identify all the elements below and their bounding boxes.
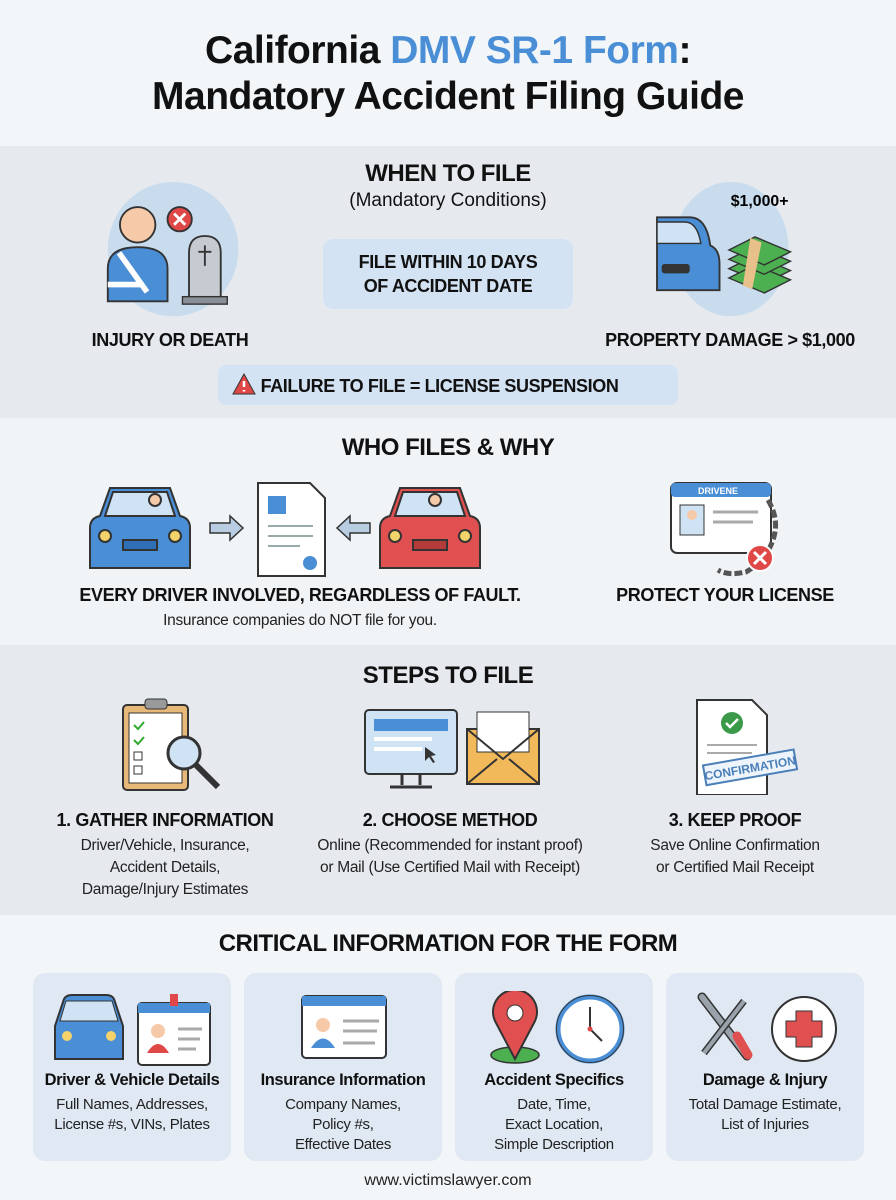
- label: injury or death: INJURY OR DEATH: [92, 330, 248, 350]
- text: insurance note: Insurance companies do NOT file for you.: [163, 612, 437, 629]
- icon: confirmation doc: [696, 699, 798, 795]
- heading: steps: STEPS TO FILE: [363, 662, 533, 689]
- icon: injury or death: [106, 182, 238, 316]
- desc: Damage/Injury Estimates: [82, 881, 248, 898]
- desc: [650, 837, 820, 876]
- callout: file within 10 days: FILE WITHIN 10 DAYS: [359, 252, 537, 272]
- label: 3. KEEP PROOF: [669, 810, 801, 830]
- panel: steps to file: [0, 645, 896, 915]
- desc: [494, 1096, 614, 1153]
- step 2: [317, 709, 583, 876]
- panel: when to file: [0, 146, 896, 418]
- label: property damage: PROPERTY DAMAGE > $1,000: [605, 330, 855, 350]
- desc: List of Injuries: [721, 1116, 809, 1133]
- title: [152, 29, 744, 118]
- desc: [285, 1096, 401, 1153]
- desc: Online (Recommended for instant proof): [317, 837, 583, 854]
- step 1: [57, 698, 273, 898]
- subheading: (Mandatory Conditions): [349, 190, 547, 211]
- desc: or Mail (Use Certified Mail with Receipt): [320, 859, 580, 876]
- heading: when to file: WHEN TO FILE: [365, 160, 531, 187]
- title: Accident Specifics: [484, 1071, 624, 1089]
- callout: file within 10 days: [323, 239, 573, 309]
- desc: Effective Dates: [295, 1136, 391, 1153]
- panel: who files & why: [0, 418, 896, 645]
- icon: insurance card: [301, 995, 387, 1059]
- heading: who files: WHO FILES & WHY: [342, 434, 554, 461]
- desc: or Certified Mail Receipt: [656, 859, 814, 876]
- desc: [54, 1096, 210, 1133]
- step 3: [650, 699, 820, 876]
- warning banner: FAILURE TO FILE = LICENSE SUSPENSION: [261, 376, 618, 396]
- icon: clipboard: [122, 698, 220, 791]
- desc: [81, 837, 249, 898]
- icon: computer and mail: [364, 709, 540, 788]
- desc: Simple Description: [494, 1136, 614, 1153]
- desc: Company Names,: [285, 1096, 401, 1113]
- text: every driver: EVERY DRIVER INVOLVED, REGARDLESS OF FAULT.: [79, 585, 521, 605]
- icon: license with chain: [670, 482, 778, 576]
- icons: car and id: [54, 994, 211, 1066]
- icon: warning: [232, 373, 256, 394]
- heading: critical information: CRITICAL INFORMATION FOR THE FORM: [219, 930, 677, 957]
- card: damage & injury: [666, 973, 864, 1161]
- icon: confirmation doc: CONFIRMATION: [703, 753, 797, 783]
- icon: cars and form: [89, 482, 481, 577]
- desc: Save Online Confirmation: [650, 837, 820, 854]
- desc: License #s, VINs, Plates: [54, 1116, 210, 1133]
- desc: Policy #s,: [312, 1116, 374, 1133]
- icon: property damage: [656, 182, 792, 316]
- title: Mandatory Accident Filing Guide: [152, 75, 744, 118]
- title: Driver & Vehicle Details: [45, 1071, 219, 1089]
- card: insurance: [244, 973, 442, 1161]
- label: 1. GATHER INFORMATION: [57, 810, 273, 830]
- desc: Exact Location,: [505, 1116, 603, 1133]
- icon: property damage: $1,000+: [731, 193, 789, 210]
- desc: Accident Details,: [110, 859, 220, 876]
- title: Insurance Information: [261, 1071, 425, 1089]
- desc: [317, 837, 583, 876]
- icons: pin and clock: [490, 991, 624, 1064]
- card: accident specifics: [455, 973, 653, 1161]
- desc: Total Damage Estimate,: [689, 1096, 841, 1113]
- footer url: www.victimslawyer.com: [364, 1172, 532, 1189]
- warning banner: [218, 365, 678, 405]
- icons: tools and cross: [698, 992, 837, 1062]
- label: protect your license: PROTECT YOUR LICENSE: [616, 585, 834, 605]
- desc: Full Names, Addresses,: [56, 1096, 208, 1113]
- label: 2. CHOOSE METHOD: [363, 810, 537, 830]
- title: California DMV SR-1 Form:: [205, 29, 691, 72]
- card: driver & vehicle: [33, 973, 231, 1161]
- desc: Driver/Vehicle, Insurance,: [81, 837, 249, 854]
- icon: license with chain: DRIVENE: [698, 486, 738, 496]
- desc: [688, 1096, 841, 1133]
- callout: file within 10 days: OF ACCIDENT DATE: [364, 276, 532, 296]
- desc: Date, Time,: [517, 1096, 591, 1113]
- title: Damage & Injury: [703, 1071, 827, 1089]
